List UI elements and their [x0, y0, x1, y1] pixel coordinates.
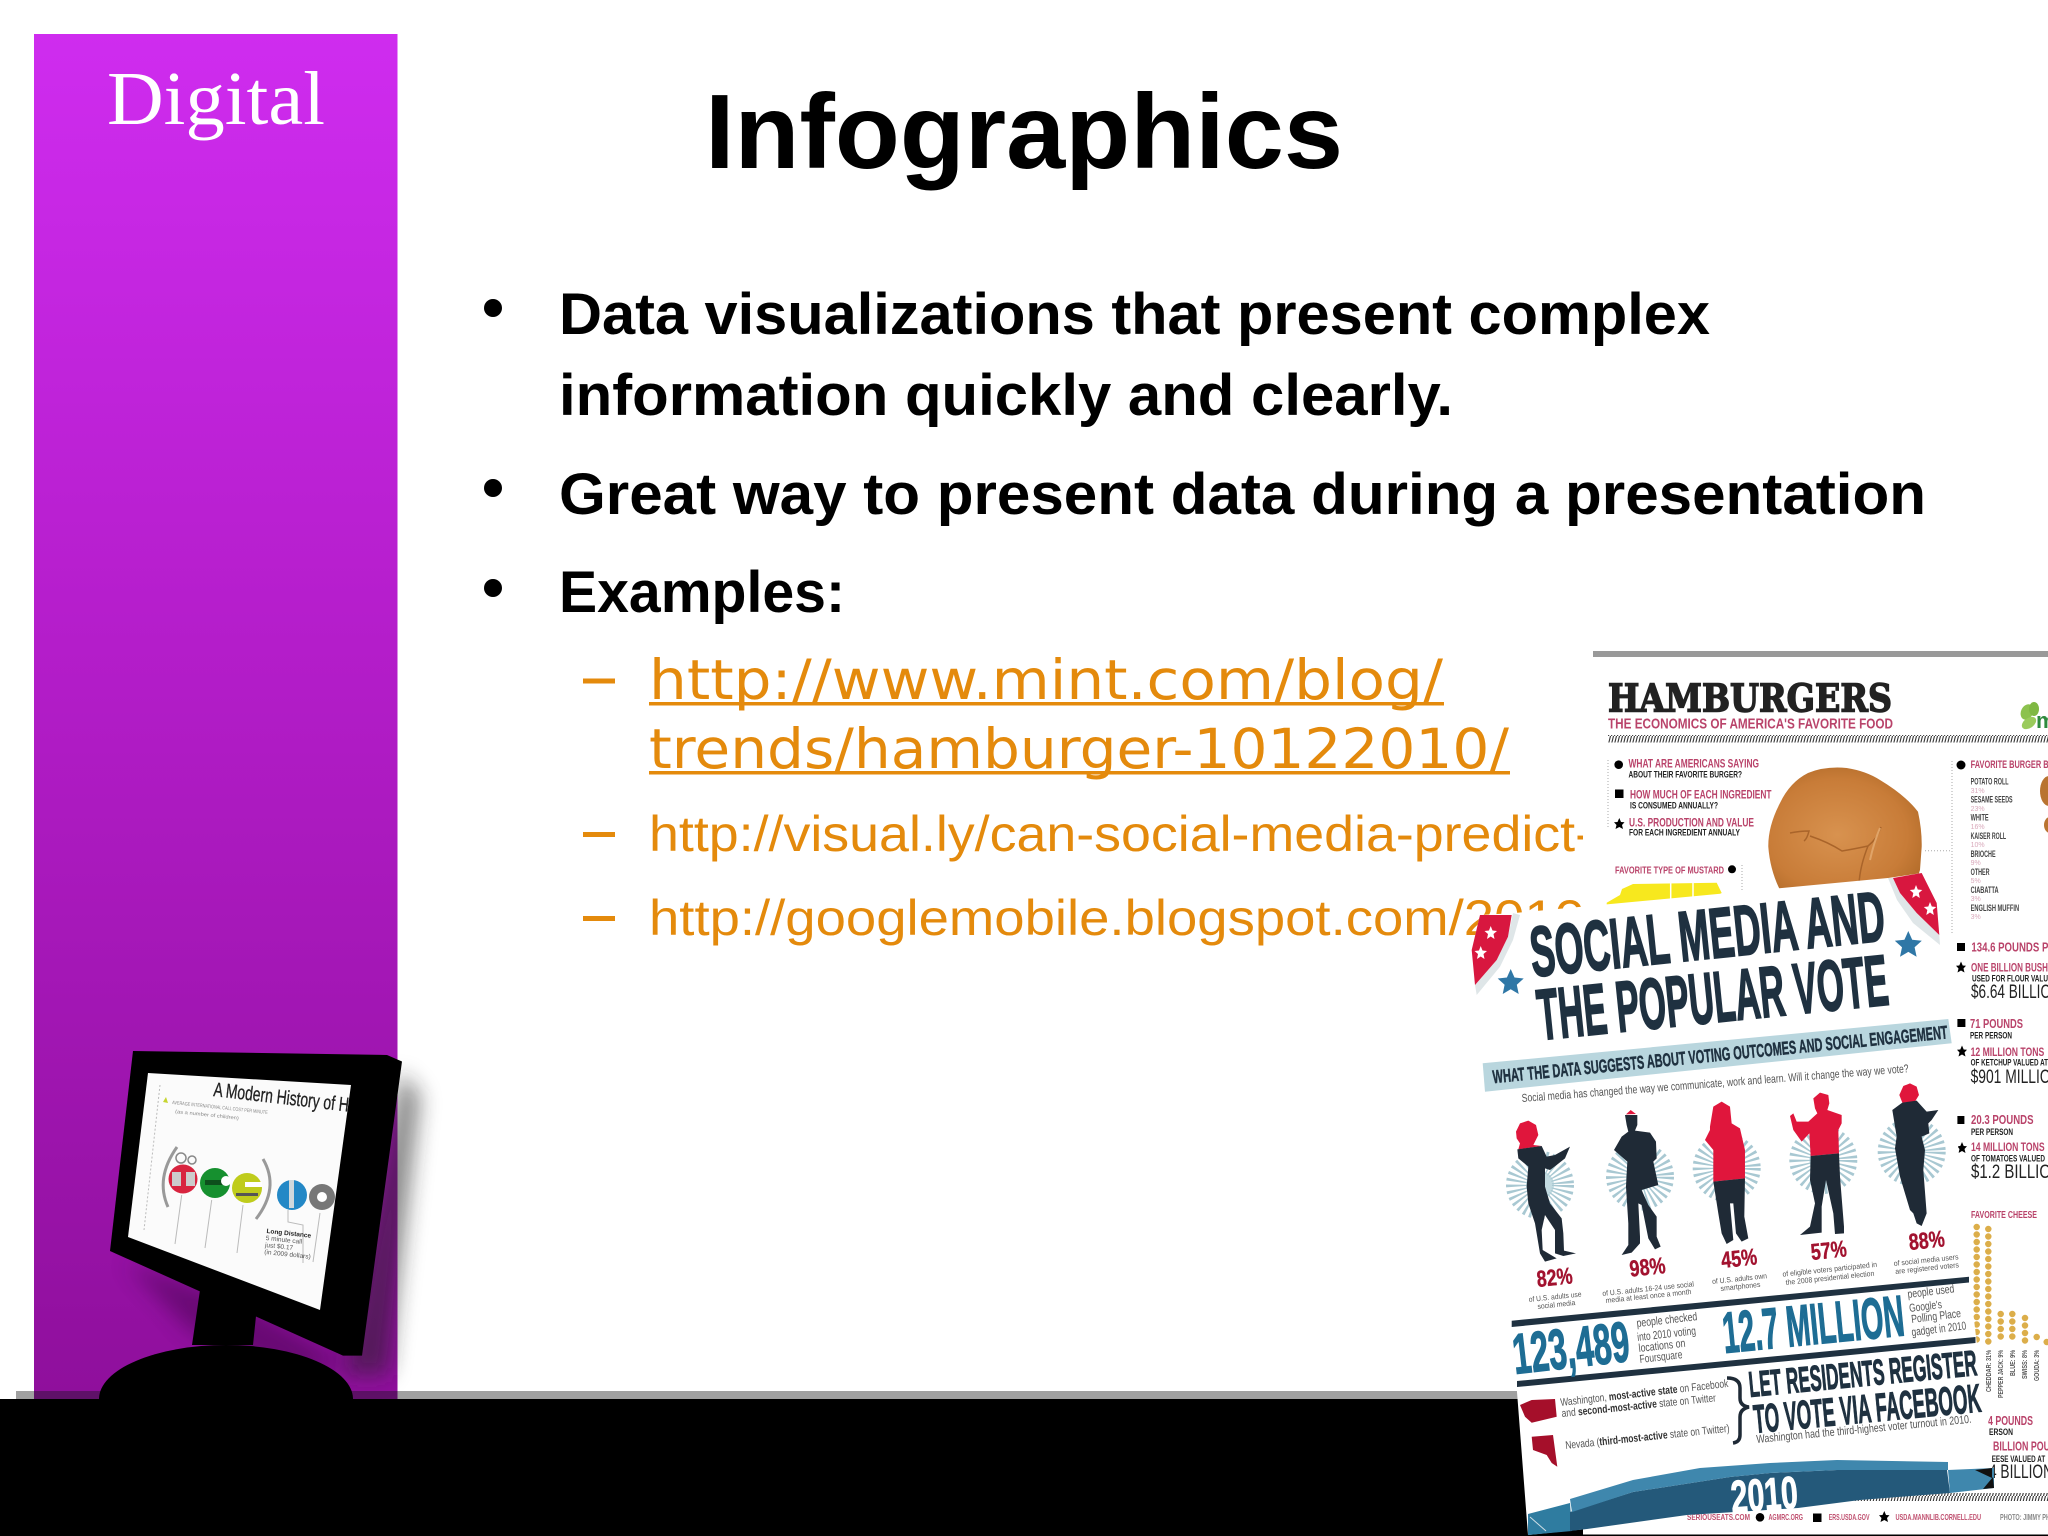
screen chart: AVERAGE INTERNATIONAL CALL COST PER MINUTE — [172, 1100, 268, 1116]
legend questions — [1608, 759, 1772, 839]
people silhouettes — [1516, 1083, 1938, 1262]
burger bun list: CIABATTA — [1971, 885, 1999, 895]
sources footer: USDA.MANNLIB.CORNELL.EDU — [1896, 1512, 1981, 1522]
stats: cheese — [1988, 1413, 2048, 1483]
burger bun list: 16% — [1971, 824, 1985, 831]
sources footer — [1687, 1511, 2048, 1522]
stat: 12.7 million: people used — [1907, 1283, 1955, 1301]
burger bun list: 5% — [1971, 878, 1981, 885]
stat: 45%: 45% — [1720, 1243, 1758, 1273]
bullet list: Data visualizations that present complex — [559, 282, 1710, 347]
intro sentence: Social media has changed the way we communicate, work and learn. Will it change the way we vote? — [1521, 1063, 1909, 1105]
burger bun list — [1925, 759, 2048, 933]
burger bun list: 23% — [1971, 806, 1985, 813]
stats: ketchup: 71 POUNDS — [1970, 1016, 2023, 1031]
sidebar heading: Digital — [107, 57, 325, 141]
persons 1 to 3 — [1516, 1102, 1748, 1262]
stat: 98%: media at least once a month — [1605, 1287, 1692, 1305]
burger bun list: ENGLISH MUFFIN — [1971, 903, 2019, 913]
cheese chart — [1971, 1209, 2047, 1398]
burger bun list: BRIOCHE — [1971, 849, 1996, 859]
burger bun list: 10% — [1971, 842, 1985, 849]
cheese chart: CHEDDAR: 31% — [1984, 1350, 1993, 1392]
state comparison: Nevada (third-most-active state on Twitter) — [1565, 1423, 1730, 1452]
burger bun photo — [1768, 768, 1922, 890]
screen chart: (as a number of children) — [175, 1109, 239, 1122]
stat: 88% — [1893, 1225, 1960, 1276]
state comparison: and second-most-active state on Twitter — [1561, 1392, 1717, 1420]
mustard bar — [1607, 883, 1722, 915]
state comparison: Washington, most-active state on Facebook — [1560, 1378, 1729, 1409]
stat: 98%: 98% — [1628, 1252, 1667, 1282]
bullet list: Examples: — [559, 560, 845, 625]
legend questions: ABOUT THEIR FAVORITE BURGER? — [1628, 770, 1742, 781]
hamburgers heading: HAMBURGERS — [1608, 676, 1892, 720]
screen chart: A Modern History of H — [212, 1079, 350, 1117]
burger bun list: KAISER ROLL — [1971, 831, 2006, 841]
stat: 57%: 57% — [1809, 1235, 1848, 1265]
stats: bread — [1956, 940, 2048, 1003]
stats: cheese: ERSON — [1989, 1427, 2013, 1438]
stat: 123,489: into 2010 voting — [1637, 1325, 1697, 1344]
stat: 57%: the 2008 presidential election — [1785, 1269, 1875, 1287]
sources footer: AGMRC.ORG — [1768, 1512, 1803, 1522]
screen chart: Long Distance — [266, 1228, 312, 1240]
stat: 45%: of U.S. adults own — [1712, 1271, 1767, 1286]
stat: 12.7 million: gadget in 2010 — [1911, 1320, 1967, 1339]
panel: purple sidebar — [34, 34, 398, 1394]
right ribbon — [1888, 873, 1940, 945]
hamburgers subtitle: THE ECONOMICS OF AMERICA'S FAVORITE FOOD — [1608, 715, 1893, 732]
link list: http://googlemobile.blogspot.com/2010 — [649, 890, 1585, 946]
mustard label — [1615, 864, 1742, 890]
legend questions: HOW MUCH OF EACH INGREDIENT — [1630, 789, 1772, 801]
blue stars — [1498, 931, 1922, 994]
stat: 98% — [1602, 1252, 1695, 1305]
stat: 123,489: locations on — [1638, 1338, 1686, 1355]
stat: 12.7 million: Polling Place — [1911, 1308, 1962, 1326]
stat: 123,489: Foursquare — [1639, 1349, 1683, 1366]
stat: 82% — [1528, 1262, 1582, 1311]
burger bun list: OTHER — [1971, 867, 1990, 877]
link list: http://www.mint.com/blog/ — [649, 648, 1444, 712]
stat: 98%: of U.S. adults 16-24 use social — [1602, 1279, 1695, 1298]
screen chart: (in 2009 dollars) — [264, 1249, 311, 1261]
legend questions: FOR EACH INGREDIENT ANNUALY — [1629, 828, 1740, 839]
stat: 57% — [1782, 1235, 1877, 1287]
stat: 45%: smartphones — [1720, 1280, 1761, 1293]
stats: tomatoes — [1957, 1112, 2048, 1183]
rule bars — [1512, 1277, 1976, 1387]
sources footer: ERS.USDA.GOV — [1829, 1512, 1870, 1522]
bullet list: Great way to present data during a presentation — [559, 462, 1926, 527]
social media title — [1526, 877, 1892, 1056]
legend questions: WHAT ARE AMERICANS SAYING — [1628, 759, 1759, 771]
panel: social media infographic — [1472, 873, 1994, 1535]
footer black band — [0, 1399, 2048, 1536]
icon: computer monitor — [99, 1051, 420, 1453]
stat: 57%: of eligible voters participated in — [1782, 1260, 1877, 1279]
burger bun list: POTATO ROLL — [1971, 777, 2009, 787]
stats: ketchup — [1957, 1016, 2048, 1088]
screen chart: just $0.17 — [264, 1242, 294, 1252]
link list — [583, 648, 1593, 946]
cheese chart: SWISS: 8% — [2020, 1350, 2029, 1379]
stat: 45% — [1712, 1243, 1767, 1293]
subtitle banner — [1483, 1019, 1952, 1092]
stat: 82%: of U.S. adults use — [1528, 1289, 1582, 1304]
headline: let residents register — [1747, 1342, 1983, 1446]
bullet list: information quickly and clearly. — [559, 363, 1453, 428]
mint logo — [2018, 702, 2048, 733]
screen chart: 5 minute call — [265, 1235, 303, 1246]
blue 2010 banner: 2010 — [1729, 1466, 1800, 1523]
stat: 88%: are registered voters — [1895, 1260, 1960, 1276]
bullet list — [484, 282, 1926, 625]
stat: 88%: of social media users — [1893, 1252, 1959, 1268]
burger bun list: 3% — [1971, 914, 1981, 921]
stat: 88%: 88% — [1907, 1225, 1946, 1255]
stat: 12.7 million — [1720, 1283, 1967, 1366]
burger bun list: 9% — [1971, 860, 1981, 867]
mustard label: FAVORITE TYPE OF MUSTARD — [1615, 864, 1724, 876]
cheese chart: BLUE: 9% — [2008, 1350, 2017, 1376]
stats: tomatoes: PER PERSON — [1971, 1127, 2013, 1138]
title: Infographics — [705, 73, 1343, 191]
link list: trends/hamburger-10122010/ — [649, 717, 1509, 781]
burger bun list: 31% — [1971, 788, 1985, 795]
stat: 82%: social media — [1537, 1298, 1576, 1311]
burger bun list: 3% — [1971, 896, 1981, 903]
persons 4 and 5 — [1790, 1083, 1938, 1235]
starburst backgrounds — [1517, 1129, 1935, 1208]
link list: http://visual.ly/can-social-media-predict- — [649, 806, 1593, 862]
stat: 12.7 million: Google's — [1909, 1299, 1943, 1315]
headline: let residents register: Washington had the third-highest voter turnout in 2010. — [1756, 1414, 1972, 1446]
burger bun list: SESAME SEEDS — [1971, 795, 2013, 805]
legend questions: U.S. PRODUCTION AND VALUE — [1629, 818, 1754, 830]
cheese chart: GOUDA: 3% — [2032, 1350, 2041, 1381]
state comparison — [1520, 1378, 1730, 1467]
brace — [1727, 1378, 1749, 1443]
cheese chart: PEPPER JACK: 9% — [1996, 1350, 2005, 1398]
left ribbon — [1472, 913, 1520, 995]
footer divider bar — [16, 1391, 1546, 1399]
hatched rule lower — [1850, 1493, 2048, 1501]
screen chart — [144, 1079, 350, 1263]
panel: hamburgers infographic — [1583, 651, 2048, 1534]
stat: 123,489: 123,489 — [1509, 1310, 1633, 1387]
stats: ketchup: PER PERSON — [1970, 1031, 2012, 1042]
burger bun list: WHITE — [1971, 813, 1989, 823]
sources footer: SERIOUSEATS.COM — [1687, 1512, 1750, 1522]
stat: 123,489: people checked — [1636, 1311, 1698, 1330]
blue 2010 banner — [1528, 1460, 1994, 1535]
stat: 82%: 82% — [1535, 1262, 1574, 1292]
legend questions: IS CONSUMED ANNUALLY? — [1630, 800, 1718, 811]
hatched rule — [1608, 735, 2048, 742]
